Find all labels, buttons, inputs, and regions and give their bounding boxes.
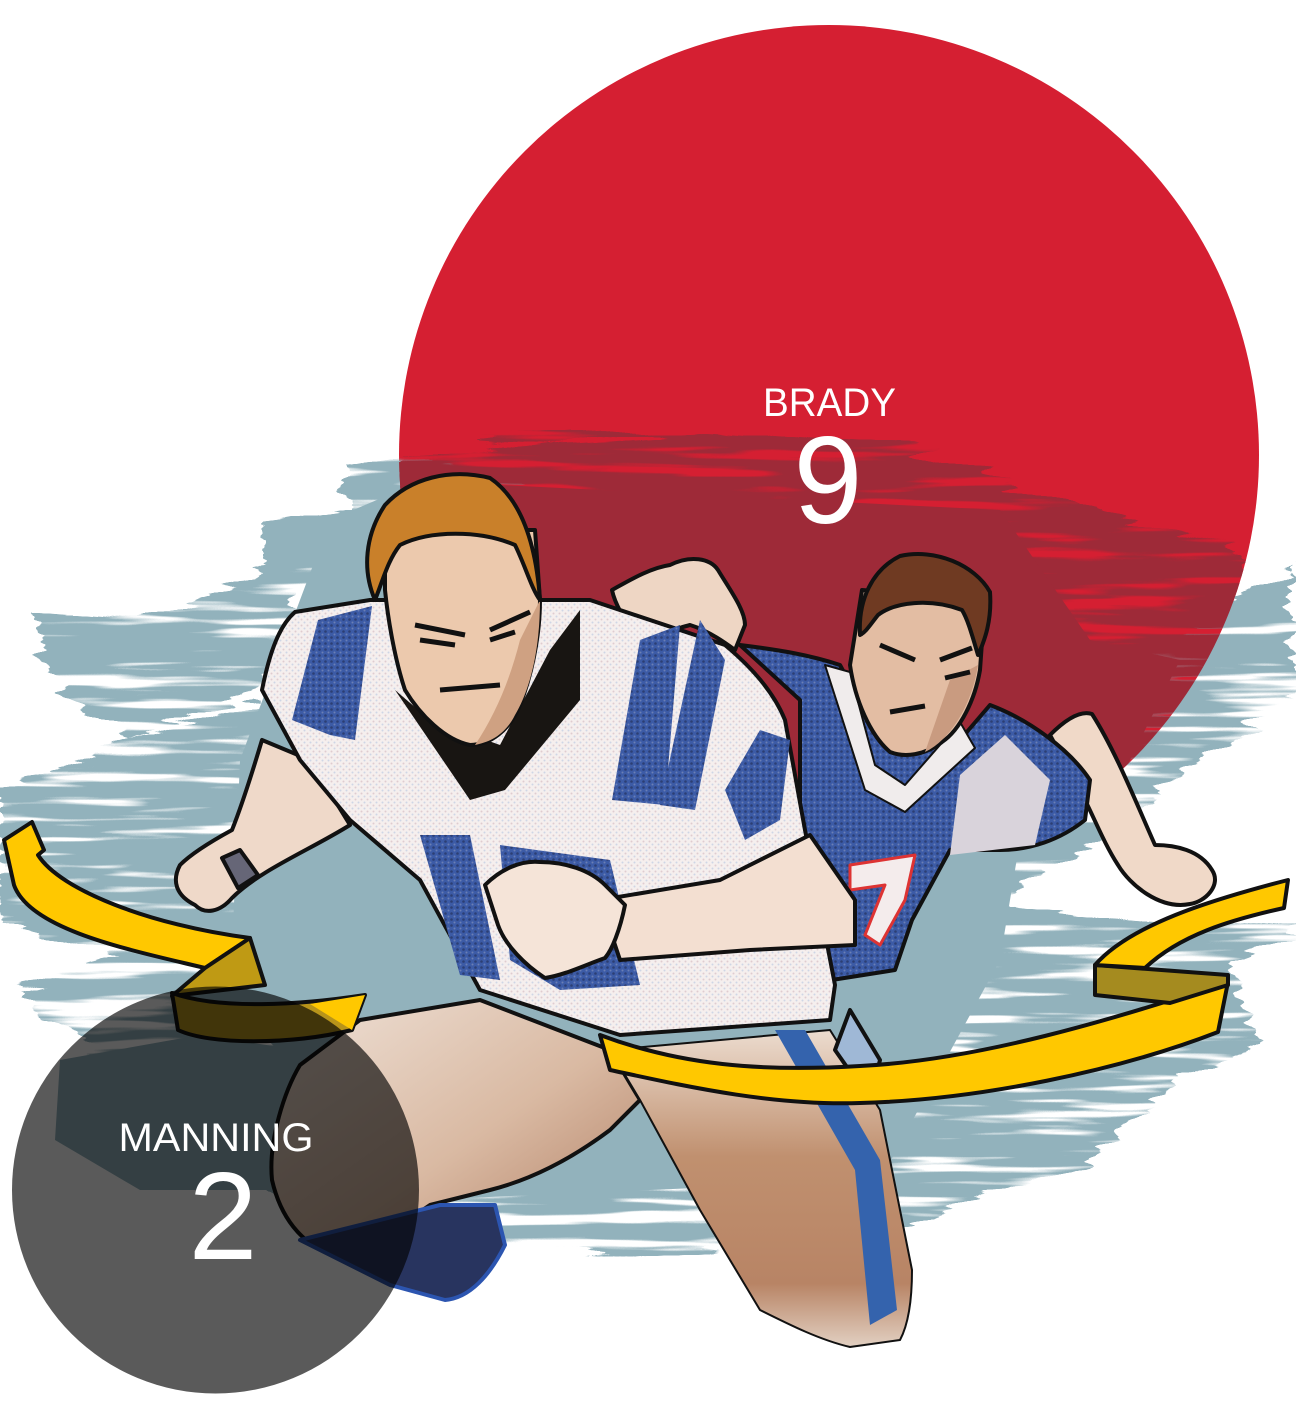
Brady number bbox=[850, 855, 915, 945]
player: Manning bbox=[176, 474, 912, 1347]
Manning blue jersey markings bbox=[292, 606, 790, 990]
sleeve number bbox=[725, 730, 790, 840]
brush stroke: upper band bbox=[268, 455, 520, 595]
Brady head bbox=[850, 590, 985, 755]
tape: bright torn end bbox=[310, 995, 365, 1030]
Manning face shadow bbox=[475, 600, 540, 745]
right shoulder stripe two bbox=[660, 620, 725, 810]
Brady white shoulder bbox=[950, 735, 1050, 855]
Manning wristband bbox=[222, 850, 258, 888]
name: Manning: MANNING bbox=[118, 1116, 314, 1160]
brush stroke: dark area behind Manning circle bbox=[55, 1035, 300, 1190]
Manning shoe bbox=[300, 1205, 505, 1300]
Manning front leg bbox=[610, 1030, 912, 1347]
dark red brush area bbox=[399, 430, 1246, 766]
right shoulder stripe one bbox=[612, 625, 680, 805]
label: Brady bbox=[763, 381, 896, 550]
brush stroke: main mass bbox=[0, 570, 1296, 1255]
Manning leg stripe bbox=[775, 1030, 897, 1325]
tape: left fold bbox=[172, 938, 265, 996]
Brady jersey bbox=[740, 645, 1090, 985]
Manning fist bbox=[485, 862, 625, 978]
Brady hair bbox=[860, 554, 990, 655]
tape: right end bbox=[1095, 880, 1288, 968]
player: Brady bbox=[612, 554, 1215, 985]
name: Brady: BRADY bbox=[763, 381, 896, 425]
brush stroke: upper left arm bbox=[36, 570, 310, 740]
left shoulder stripe bbox=[292, 606, 372, 740]
Manning trailing leg bbox=[271, 1000, 640, 1255]
finish tape: right segment bbox=[600, 880, 1288, 1103]
label: Manning bbox=[118, 1116, 314, 1286]
finish tape: left segment bbox=[4, 822, 365, 1041]
Manning jersey bbox=[262, 600, 835, 1035]
Brady face features bbox=[880, 645, 972, 712]
value: Manning 2: 2 bbox=[189, 1148, 257, 1286]
Brady collar bbox=[825, 665, 975, 812]
Manning head bbox=[385, 530, 540, 745]
brush strokes: blue-grey background bbox=[0, 455, 1296, 1255]
tape: left lower band bbox=[172, 993, 365, 1041]
value: Brady 9: 9 bbox=[794, 412, 862, 550]
tape: main band bbox=[600, 982, 1228, 1103]
Brady face shadow bbox=[925, 665, 978, 752]
Brady right arm bbox=[1050, 713, 1215, 905]
chest number bbox=[420, 835, 640, 990]
Manning shorts fold bbox=[835, 1010, 880, 1100]
red circle: Brady bbox=[399, 25, 1259, 885]
Manning collar shadow bbox=[395, 610, 580, 800]
Manning forearm bbox=[600, 835, 855, 960]
brush stroke: solid fill behind figures bbox=[230, 490, 1040, 1200]
Manning hair bbox=[367, 474, 540, 600]
Manning left arm bbox=[176, 740, 350, 911]
darkened brush strokes over red circle bbox=[399, 430, 1246, 780]
tape: right fold bbox=[1095, 965, 1228, 1003]
tape: left band bbox=[4, 822, 250, 968]
dark red solid lower area bbox=[400, 482, 1180, 780]
Manning face features bbox=[415, 612, 530, 690]
grey circle: Manning bbox=[12, 986, 419, 1394]
Brady hand gripping jersey bbox=[612, 559, 745, 650]
